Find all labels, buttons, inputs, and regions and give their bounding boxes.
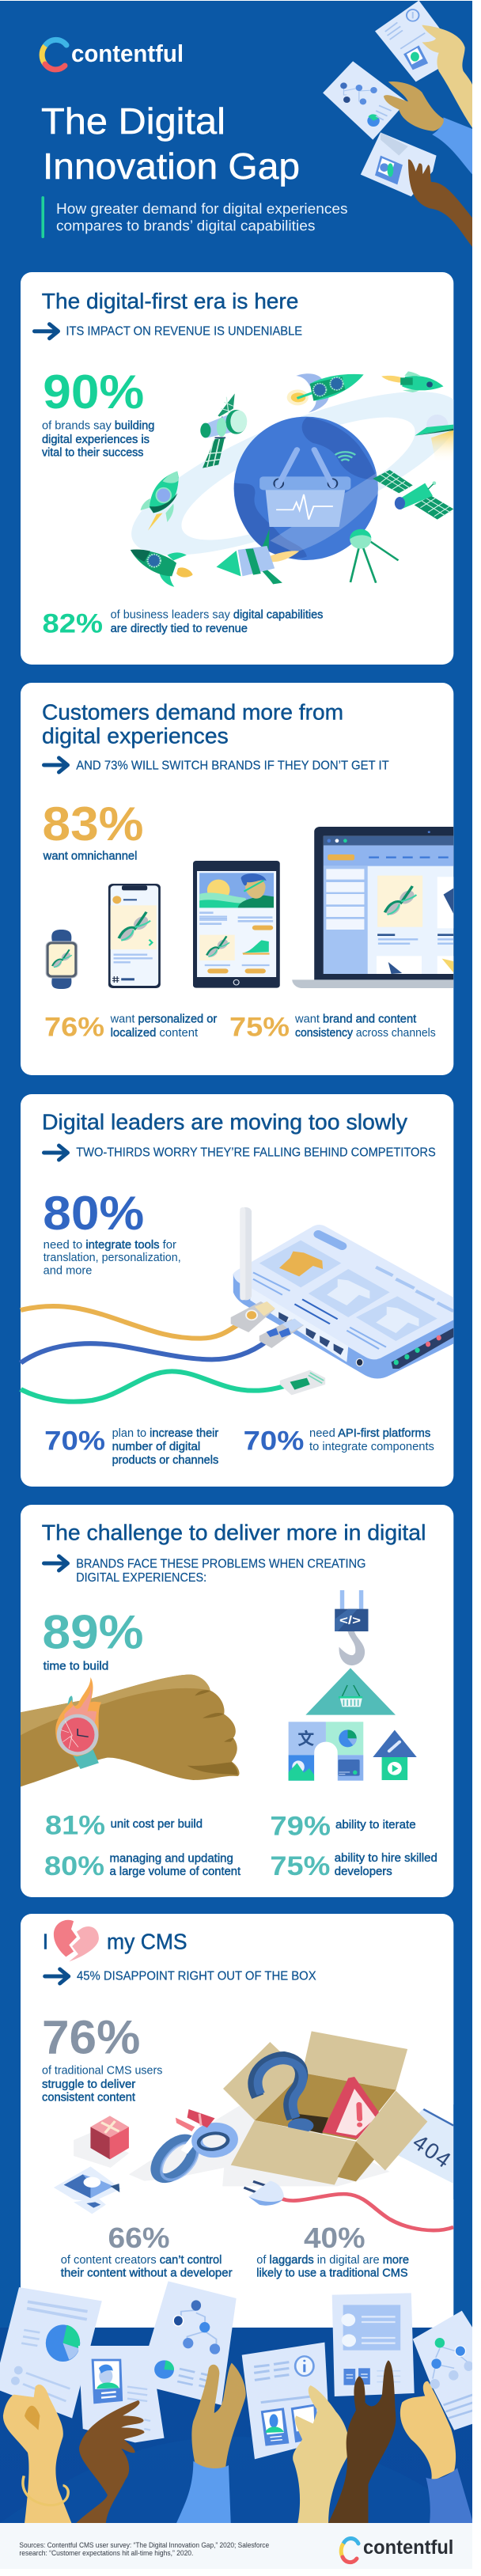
heading: digital experiences [42,723,229,748]
side mask [453,2104,472,2199]
icon: rocket left [141,472,179,531]
stat text: building digital experiences: vital to their success [42,447,143,460]
paper: tree diagram [138,2281,237,2405]
hand: dark brown left [76,2400,144,2523]
stat text: managing: a large volume of content [109,1866,240,1878]
subheading: DIGITAL EXPERIENCES: [76,1571,206,1585]
stat text: laggards: likely to use a traditional CMS [256,2267,408,2280]
icon: broken chain [149,2109,235,2185]
paper: pie chart [0,2287,102,2419]
icon: sputnik [350,529,398,583]
heading [42,699,343,748]
stat: 82%: 82% [43,608,103,638]
icon: satellite top-left [200,393,247,468]
icon: watch on fire [55,1677,101,1769]
icon: broken heart [54,1920,99,1961]
hand: peach with sleeve [400,2381,473,2523]
stat text: integrate tools: need to integrate tools for [44,1239,176,1252]
panel: I broken-heart my CMS [21,1914,472,2334]
stat text: personalized [110,1013,217,1040]
stat text: increase products: number of digital [112,1441,200,1453]
icon: shopping basket [259,449,350,527]
arrow [44,1556,68,1570]
sources [19,2541,269,2558]
subheading: BRANDS FACE THESE PROBLEMS WHEN CREATING [76,1557,365,1570]
stat text: personalized: want personalized or [110,1013,217,1026]
title: Innovation Gap [43,146,300,187]
stat: 80% volume: 80% [44,1851,104,1881]
stat text: integrate tools: translation, personalization, [44,1252,181,1264]
icon: unplugged cable [244,2181,453,2230]
stat text: consistency [294,1013,436,1040]
logo: contentful [341,2536,453,2563]
heading: my CMS [107,1929,187,1953]
stat text: traditional CMS users [42,2065,162,2104]
arrow [35,324,59,339]
arrow [44,1146,68,1160]
subheading [76,1557,365,1585]
stat text: building digital experiences: digital experiences is [42,434,150,446]
subtitle with green bar: compares to brands’ digital capabilities [56,218,315,234]
stat text: API-first: need API-first platforms [309,1427,430,1440]
stat text: consistency: consistency across channels [295,1027,436,1040]
orange cable and plug [21,1301,275,1339]
stat: 81%: 81% [45,1811,105,1841]
illustration: planet with basket, rockets and satellites [130,371,454,587]
stat text: content creators [61,2254,233,2280]
stat text: consistency: want brand and content [294,1013,416,1026]
heading: Customers demand more from [42,699,343,724]
stat text: digital capabilities: of business leaders say digital capabilities [111,609,323,622]
stat text: unit cost: unit cost per build [111,1818,203,1831]
paper: info card [242,2343,330,2459]
stat text: traditional CMS users: consistent content [42,2092,135,2104]
stat text: integrate tools [44,1239,181,1278]
heading: I [43,1929,48,1953]
illustration: crane building blocks [289,1590,417,1781]
sources: Sources: Contentful CMS user survey: “The Digital Innovation Gap,” 2020; Salesforce [19,2541,269,2550]
stat: 40%: 40% [304,2222,365,2254]
404 label: 404 [408,2130,456,2173]
stat text: content creators: of content creators can’t control [61,2254,222,2267]
heading: Digital leaders are moving too slowly [42,1110,407,1135]
code symbol: </> [339,1614,361,1627]
blue cable and plug [21,1319,304,1363]
stat text: API-first: to integrate components [309,1441,434,1453]
translate character: 文 [297,1729,314,1748]
stat: 66%: 66% [108,2222,169,2254]
stat text: personalized: localized content [111,1027,198,1040]
subheading: TWO-THIRDS WORRY THEY’RE FALLING BEHIND COMPETITORS [76,1146,436,1159]
stat text: digital capabilities: are directly tied to revenue [111,623,248,635]
stat text: increase products: products or channels [112,1454,218,1467]
logo: contentful: contentful [363,2536,453,2559]
panel: challenge to deliver [21,1505,453,1897]
logo: contentful: contentful [71,40,184,67]
title [41,100,300,187]
heading: The digital-first era is here [42,289,298,313]
stat: 83%: 83% [43,797,144,850]
subheading: 45% DISAPPOINT RIGHT OUT OF THE BOX [77,1969,316,1983]
stat text: integrate tools: and more [44,1265,92,1278]
panel: digital-first era [21,272,481,665]
subheading: AND 73% WILL SWITCH BRANDS IF THEY DON’T GET IT [76,759,389,772]
stat text: managing: managing and updating [109,1852,233,1865]
arrow [44,758,68,772]
illustration: router and cables [21,1207,453,1402]
subtitle with green bar [41,196,348,238]
stat text: iterate: ability to iterate [335,1819,416,1832]
icon: rocket bottom [216,528,299,584]
stat text: omnichannel: want omnichannel [43,850,137,863]
stat: 79%: 79% [270,1811,331,1841]
icon: open cardboard box [223,2031,427,2185]
hand: pale [293,2385,349,2523]
stat text: hire developers [335,1852,437,1878]
stat text: hire developers: ability to hire skilled [335,1852,437,1865]
stat text: API-first [309,1427,434,1453]
paper: right tree [413,2311,473,2430]
icon: smartwatch [46,930,78,989]
icon: flying saucer [415,415,454,456]
hand: yellow with bangle [3,2385,71,2523]
icon: crane hook with code [335,1590,368,1665]
stat text: laggards [256,2254,409,2280]
stat text: increase products: plan to increase their [112,1427,218,1440]
stat: 76%: 76% [42,2011,140,2064]
hand: tan with sleeve [176,2363,246,2523]
roof block [305,1668,396,1715]
stat: 75% developers: 75% [270,1851,330,1881]
illustration: broken things and box [54,2031,453,2230]
stat text: digital capabilities [111,609,323,635]
stat text: time to build: time to build [44,1661,108,1673]
stat text: managing [109,1852,240,1878]
illustration: raised hands with papers [0,2281,473,2523]
icon: 404 sheet [399,2108,454,2184]
icon: rocket lower left [131,550,193,587]
stat text: laggards: of laggards in digital are more [256,2254,409,2267]
panel: customers demand more [21,683,453,1075]
router [233,1207,453,1378]
heading [43,1929,187,1953]
stat: 90%: 90% [43,366,144,419]
paper: profile list [332,2293,415,2396]
stat text: hire developers: developers [335,1866,392,1878]
title: The Digital [41,100,225,142]
dark blue band behind hands [0,2328,472,2523]
stat: 89%: 89% [43,1605,144,1658]
illustration: arm with burning watch [21,1675,239,1786]
icon: rocket top [287,373,364,413]
stat text: building digital experiences: of brands say building [42,420,154,433]
stat: 80%: 80% [43,1187,144,1240]
heading: The challenge to deliver more in digital [42,1521,426,1545]
green cable and plug [21,1370,325,1402]
icon: satellite right [373,470,453,520]
icon: red cube [90,2116,129,2159]
icon: broken image [54,2166,121,2214]
stat: 70% API-first: 70% [244,1426,304,1457]
paper: profile [78,2346,165,2442]
sources: research: “Customer expectations hit all-time highs,” 2020. [19,2549,193,2558]
stat text: content creators: their content without a developer [61,2267,233,2280]
subtitle with green bar: How greater demand for digital experiences [56,200,348,217]
stat text: traditional CMS users: of traditional CMS users [42,2065,162,2078]
icon: rocket right [381,371,444,392]
icon: phone [108,884,161,988]
stat: 70% products: 70% [44,1426,105,1457]
stat: 75%: 75% [229,1012,290,1042]
icon: tablet [193,861,280,988]
illustration: hands holding papers [323,1,473,248]
illustration: devices [46,827,453,989]
subheading: ITS IMPACT ON REVENUE IS UNDENIABLE [66,324,302,338]
small house block [373,1730,417,1780]
header [41,1,473,248]
stat: 76%: 76% [44,1012,104,1042]
arch blocks [289,1722,363,1781]
panel: digital leaders [21,1094,453,1487]
footer [0,2523,472,2569]
icon: laptop [292,827,453,988]
stat text: increase products [112,1427,218,1467]
arrow [45,1969,69,1983]
stat text: traditional CMS users: struggle to deliver [42,2078,135,2091]
stat text: building digital experiences [42,420,154,460]
hand: dark brown right [328,2360,396,2523]
